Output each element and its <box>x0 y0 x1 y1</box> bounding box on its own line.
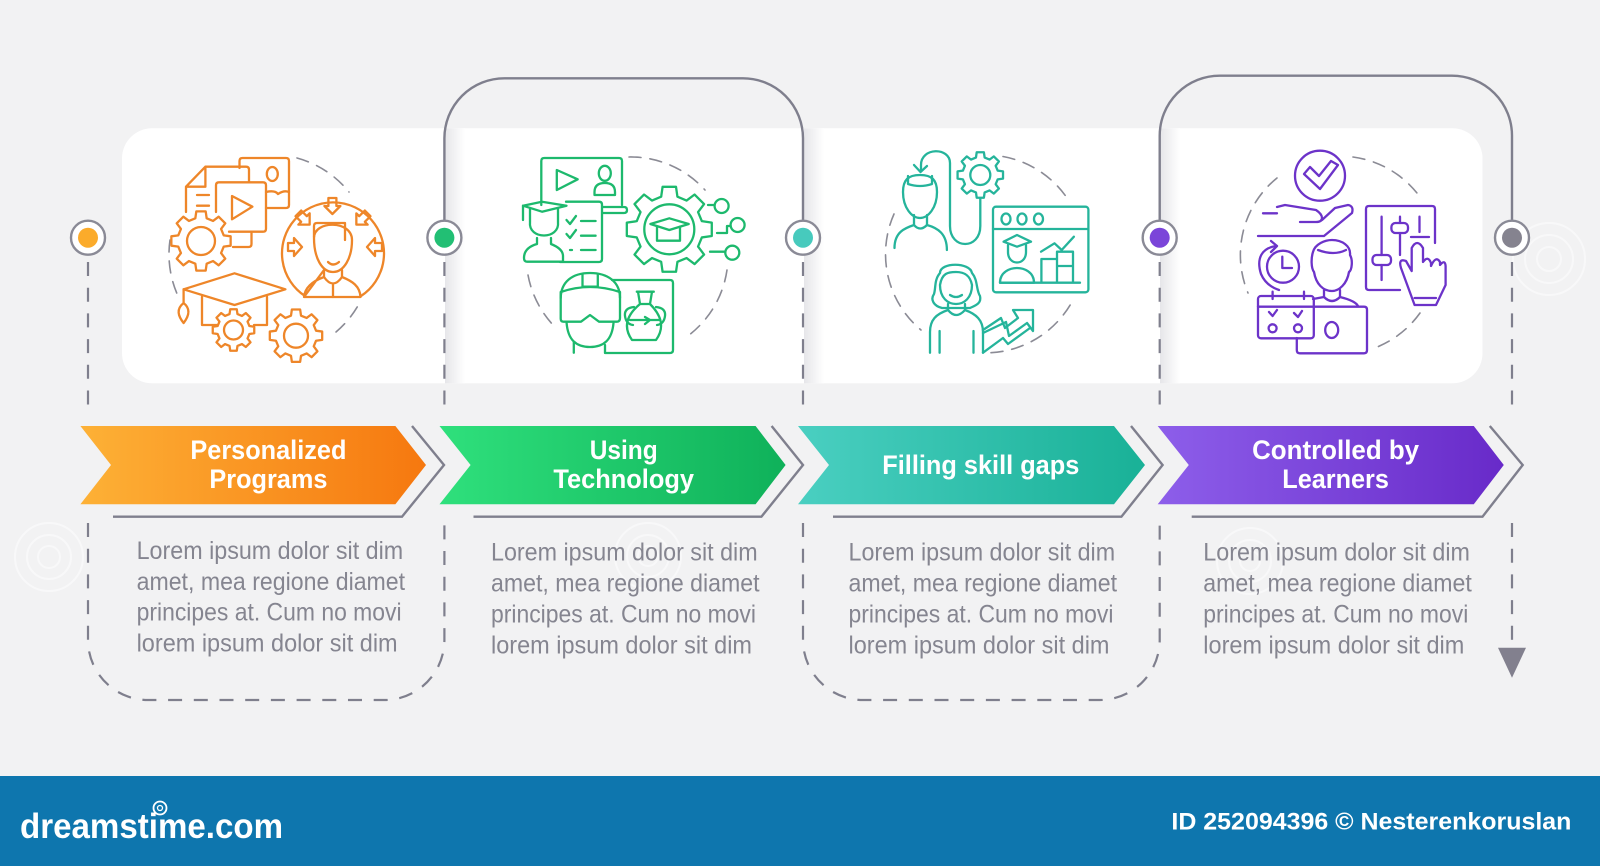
text block: step 1 description <box>137 537 405 658</box>
banner: Using Technology: Technology <box>553 464 694 494</box>
text block: step 2 description: amet, mea regione diamet <box>491 570 760 598</box>
text block: step 3 description: Lorem ipsum dolor sit dim <box>848 539 1115 567</box>
arrow head: end of flow <box>1498 648 1526 678</box>
text block: step 2 description: lorem ipsum dolor sit dim <box>491 631 752 659</box>
node: purple <box>1143 221 1177 255</box>
banner: Personalized Programs: Programs <box>209 464 327 494</box>
connector: final dashed line <box>1511 523 1513 645</box>
node: green <box>427 221 461 255</box>
text block: step 2 description <box>491 539 760 659</box>
text block: step 4 description <box>1203 539 1472 659</box>
text block: step 2 description: principes at. Cum no movi <box>491 600 756 628</box>
footer logo: dreamstime.com <box>20 807 283 846</box>
footer band <box>0 776 1600 866</box>
text block: step 3 description: amet, mea regione diamet <box>848 570 1117 598</box>
connector: solid arch over step 4 <box>1160 76 1512 220</box>
banner: Personalized Programs: Personalized <box>190 435 346 465</box>
banner: Controlled by Learners: Controlled by <box>1252 435 1419 465</box>
text block: step 1 description: Lorem ipsum dolor sit dim <box>137 537 403 565</box>
node: teal <box>786 221 820 255</box>
connector: lower dashed loop, step 1 to 2 <box>88 523 444 700</box>
watermark swirls <box>15 223 1585 594</box>
text block: step 4 description: amet, mea regione diamet <box>1203 570 1472 598</box>
text block: step 3 description: lorem ipsum dolor sit dim <box>848 631 1110 659</box>
footer credit: ID 252094396 © Nesterenkoruslan <box>1171 808 1571 835</box>
text block: step 1 description: principes at. Cum no movi <box>137 599 402 627</box>
text block: step 4 description: lorem ipsum dolor sit dim <box>1203 631 1464 659</box>
text block: step 4 description: principes at. Cum no movi <box>1203 600 1468 628</box>
text block: step 2 description: Lorem ipsum dolor sit dim <box>491 539 758 567</box>
connector: upper dashed verticals <box>88 262 1512 410</box>
icon: filling skill gaps <box>886 151 1088 353</box>
icon: personalized programs <box>169 158 384 362</box>
banner: Filling skill gaps: Filling skill gaps <box>882 450 1079 480</box>
banner: Controlled by Learners: Learners <box>1282 464 1389 494</box>
banner: Filling skill gaps <box>798 426 1163 517</box>
panel: white icon card <box>122 128 1482 383</box>
text block: step 1 description: amet, mea regione diamet <box>137 568 405 596</box>
node: gray <box>1495 221 1529 255</box>
text block: step 3 description <box>848 539 1117 659</box>
text block: step 1 description: lorem ipsum dolor sit dim <box>137 630 398 658</box>
banner: Controlled by Learners <box>1158 426 1523 517</box>
icon: controlled by learners <box>1240 151 1446 353</box>
banner: Personalized Programs <box>80 426 444 517</box>
text block: step 4 description: Lorem ipsum dolor sit dim <box>1203 539 1470 567</box>
icon: using technology <box>523 157 745 353</box>
connector: lower dashed loop, step 3 to 4 <box>803 523 1160 700</box>
banner: Using Technology <box>440 426 803 517</box>
text block: step 3 description: principes at. Cum no movi <box>848 600 1114 628</box>
node: orange <box>71 221 105 255</box>
connector: solid arch over step 2 <box>444 78 803 220</box>
banner: Using Technology: Using <box>590 435 658 465</box>
